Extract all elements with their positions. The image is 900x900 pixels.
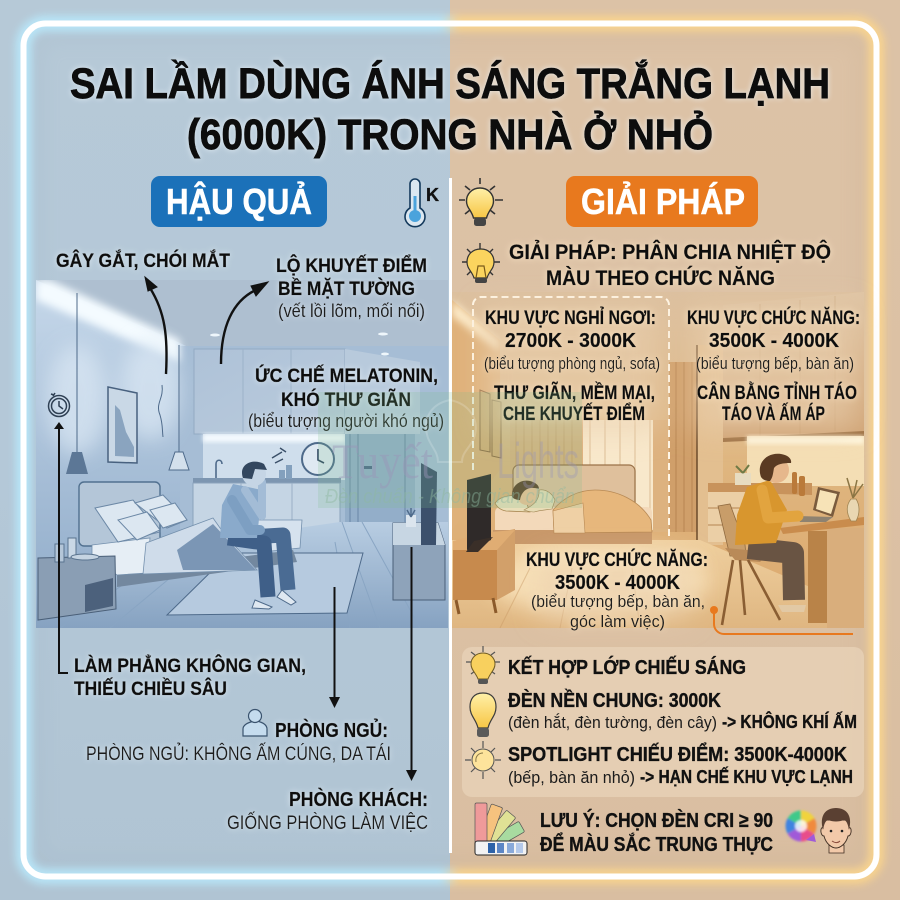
arrow: clock to flat-space label [54,422,68,673]
text: function zone right: 3500K - 4000K [709,330,840,352]
title: SAI LẦM DÙNG ÁNH SÁNG TRẮNG LẠNH [70,59,830,108]
label: flat space: LÀM PHẲNG KHÔNG GIAN, [74,655,306,677]
arrow: to wall defects [221,282,268,364]
heading: layers: KẾT HỢP LỚP CHIẾU SÁNG [508,655,746,679]
backsplash right [747,436,864,486]
panel: left room illustration [36,280,448,628]
text: spotlight: -> HẠN CHẾ KHU VỰC LẠNH [640,766,853,787]
note: CRI [540,808,773,856]
door area [345,434,415,526]
watermark: Tuyết [332,433,433,489]
label: living room: GIỐNG PHÒNG LÀM VIỆC [227,812,428,834]
label: bedroom: PHÒNG NGỦ: KHÔNG ẤM CÚNG, DA TÁI [86,743,391,765]
text: ambient light: ĐÈN NỀN CHUNG: 3000K [508,689,721,712]
TV and stand [453,474,515,614]
kitchen counter [192,460,341,528]
wall crack [158,385,163,437]
label: melatonin [248,365,444,431]
text: function zone bottom: 3500K - 4000K [555,572,681,594]
label: wall defects: BỀ MẶT TƯỜNG [278,278,415,300]
nightstand [38,538,116,620]
label: glare: GÂY GẮT, CHÓI MẮT [56,250,230,272]
connector: orange line [710,606,853,634]
icon: color wheel [786,810,816,842]
badge: consequences: HẬU QUẢ [166,180,312,222]
heading: solution statement: MÀU THEO CHỨC NĂNG [546,266,775,290]
man sitting on bed [220,448,296,609]
label: living room [227,787,428,834]
wall clock [302,443,334,475]
back wall [180,346,448,536]
panel: right room illustration [452,292,864,628]
upper cabinets right [723,292,864,442]
ceiling spots [210,332,389,356]
icon: color fan deck [475,803,527,855]
arrow: to bedroom [329,587,340,708]
label: melatonin: (biểu tượng người khó ngủ) [248,411,444,431]
floor [36,522,448,628]
TV stand and TV [393,463,445,600]
text: function zone right [687,307,860,425]
title: (6000K) TRONG NHÀ Ở NHỎ [187,110,713,159]
bed frame [117,550,297,587]
label: flat space: THIẾU CHIỀU SÂU [74,678,227,700]
watermark: Lights [497,433,579,489]
label: bedroom [86,718,391,765]
pillows [95,495,187,542]
text: function zone bottom: góc làm việc) [570,612,665,631]
label: melatonin: ỨC CHẾ MELATONIN, [255,365,438,387]
label: bedroom: PHÒNG NGỦ: [275,718,388,742]
text: function zone bottom: KHU VỰC CHỨC NĂNG: [526,549,708,571]
picture frames [480,390,501,458]
text: rest zone: (biểu tượng phòng ngủ, sofa) [484,354,660,373]
label: living room: PHÒNG KHÁCH: [289,787,428,811]
icon: layer bulb [466,646,500,684]
icon: ambient bulb [470,693,496,737]
icon: person [243,710,267,736]
icon: face [821,808,851,853]
label: wall defects [276,255,427,321]
text: function zone right: TÁO VÀ ẤM ÁP [722,403,825,425]
label: wall defects: LỘ KHUYẾT ĐIỂM [276,255,427,277]
text: ambient light [508,689,857,732]
watermark [318,392,582,508]
bed [79,482,302,587]
text: rest zone: 2700K - 3000K [505,330,637,352]
text: function zone right: KHU VỰC CHỨC NĂNG: [687,307,860,329]
text: spotlight: (bếp, bàn ăn nhỏ) [508,768,635,787]
text: rest zone: KHU VỰC NGHỈ NGƠI: [485,307,656,329]
text: function zone right: CÂN BẰNG TỈNH TÁO [697,382,857,404]
pendant lamps [66,293,189,474]
text: spotlight: SPOTLIGHT CHIẾU ĐIỂM: 3500K-4000K [508,743,848,766]
backsplash [203,434,345,480]
man at desk [718,454,806,625]
arrow: to living room [406,547,417,781]
icon: thermometer [405,179,439,227]
text: rest zone: CHE KHUYẾT ĐIỂM [503,403,645,425]
label: wall defects: (vết lồi lõm, mối nối) [278,301,425,321]
text: ambient light: -> KHÔNG KHÍ ẤM [722,711,857,732]
heading: solution statement: GIẢI PHÁP: PHÂN CHIA NHIỆT ĐỘ [509,240,831,264]
text: rest zone: THƯ GIÃN, MỀM MẠI, [494,382,655,404]
text: ambient light: (đèn hắt, đèn tường, đèn cây) [508,713,717,732]
text: spotlight [508,743,853,787]
text: rest zone [484,307,660,425]
heading: solution statement [509,240,831,290]
icon: thermometer: K [426,185,439,205]
badge: solutions: GIẢI PHÁP [581,181,745,222]
ceiling light strip [36,280,180,362]
text: function zone right: (biểu tượng bếp, bàn ăn) [696,354,854,373]
note: CRI: ĐỂ MÀU SẮC TRUNG THỰC [540,832,773,856]
left wall [36,280,186,590]
bed right [493,465,652,544]
watermark: Đèn chuẩn - Không gian chuẩn [325,486,575,508]
title [70,59,830,159]
window curtains [515,420,653,530]
arrow: to glare [145,277,167,374]
panel: lighting layers [462,646,864,797]
icon: spotlight [465,741,501,779]
rug [167,553,363,615]
floor right [452,540,864,628]
center divider [449,178,452,853]
kitchen counter right [708,465,812,542]
text: function zone bottom: (biểu tượng bếp, bàn ăn, [531,592,705,611]
desk with laptop and vase [780,478,864,628]
label: melatonin: KHÓ THƯ GIÃN [281,389,411,411]
note: CRI: LƯU Ý: CHỌN ĐÈN CRI ≥ 90 [540,808,773,832]
text: function zone bottom [526,549,708,631]
picture frame [108,387,137,463]
light haze over right room text [482,306,857,620]
upper cabinets [194,349,420,434]
mattress [92,538,150,575]
tall door [697,345,723,545]
curtain column [669,362,699,532]
blanket [143,518,257,574]
icon: alarm clock [48,393,70,416]
icon: solution bulb [462,243,500,283]
label: flat space [74,655,306,700]
wall light pools [47,340,180,455]
dashed zone box [473,297,669,540]
icon: header bulb [459,178,503,226]
